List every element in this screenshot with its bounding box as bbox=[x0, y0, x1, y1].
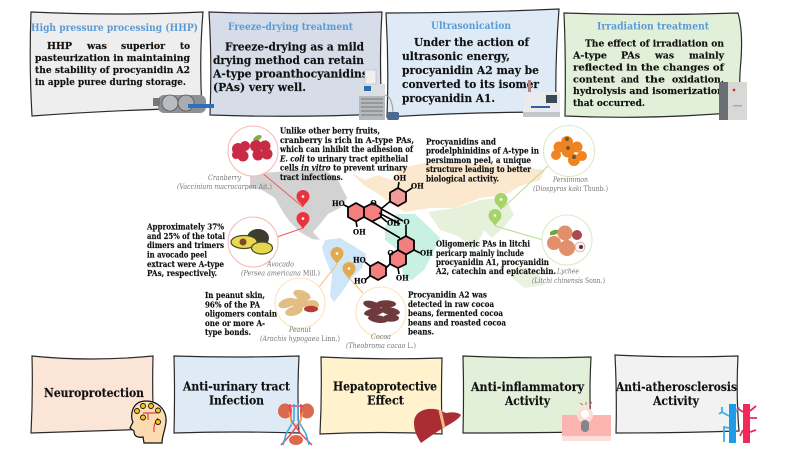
label: cranberry: (Vaccinium macrocarpon Ait.) bbox=[177, 183, 272, 191]
heading: anti-atherosclerosis bbox=[615, 380, 737, 408]
molecule: procyanidin A2: HO bbox=[354, 276, 367, 286]
text: litchi description bbox=[435, 239, 556, 276]
text: irradiation body: reflected in the changes of bbox=[573, 62, 725, 74]
food: lychee bbox=[542, 215, 592, 265]
heading: anti-inflammatory: Anti-inflammatory bbox=[470, 380, 585, 394]
text: HHP body: HHP bbox=[47, 41, 72, 52]
text: peanut description: one or more A- bbox=[205, 318, 265, 328]
heading: ultrasonication: Ultrasonication bbox=[431, 21, 512, 32]
label: cranberry: Cranberry bbox=[208, 174, 242, 182]
text: HHP body: to bbox=[180, 41, 191, 52]
panel: freeze-drying bbox=[209, 12, 382, 116]
panel: anti-inflammatory activity bbox=[463, 356, 591, 433]
label: persimmon: Persimmon bbox=[552, 176, 588, 184]
pin: lychee bbox=[488, 209, 502, 226]
heading: hepatoprotective: Hepatoprotective bbox=[333, 380, 437, 394]
icon: kidneys bbox=[278, 404, 314, 445]
text: litchi description: Oligomeric PAs in litchi bbox=[436, 239, 530, 249]
heading: anti-inflammatory bbox=[470, 380, 585, 408]
molecule: procyanidin A2: O bbox=[404, 218, 410, 226]
food: avocado bbox=[228, 217, 278, 267]
icon: liver bbox=[414, 409, 461, 443]
text: cranberry description: tract infections. bbox=[280, 172, 343, 182]
label: peanut bbox=[260, 326, 340, 343]
molecule: procyanidin A2: HO bbox=[332, 199, 345, 208]
text: irradiation body: A-type bbox=[572, 50, 607, 62]
text: irradiation body: oxidation, bbox=[672, 74, 724, 86]
label: lychee: (Litchi chinensis Sonn.) bbox=[532, 277, 605, 285]
pin: cocoa bbox=[342, 262, 356, 279]
label: cocoa: (Theobroma cacao L.) bbox=[346, 342, 416, 350]
label: lychee: Lychee bbox=[556, 268, 579, 276]
text: HHP body: the stability of procyanidin A2 bbox=[35, 65, 190, 76]
icon: irradiation cabinet bbox=[719, 82, 747, 120]
panel: high pressure processing bbox=[30, 12, 203, 116]
text: ultrasonication body: Under the action of bbox=[414, 35, 530, 49]
text: freeze-drying body: A-type proanthocyanidins bbox=[212, 66, 368, 80]
label: persimmon: (Diospyros kaki Thunb.) bbox=[533, 185, 608, 193]
text: cranberry description: E. coli to urinary tract epithelial bbox=[279, 153, 408, 163]
icon: blood vessels bbox=[719, 404, 757, 443]
label: peanut: (Arachis hypogaea Linn.) bbox=[260, 335, 340, 343]
text: irradiation body: content bbox=[573, 74, 616, 86]
label: cocoa: Cocoa bbox=[371, 333, 391, 341]
text: irradiation body: mainly bbox=[689, 50, 724, 62]
label: avocado bbox=[241, 261, 320, 278]
text: avocado description: in avocado peel bbox=[147, 250, 207, 260]
text: HHP body: was bbox=[86, 41, 107, 52]
label: persimmon bbox=[533, 176, 608, 193]
text: irradiation body: PAs bbox=[621, 50, 640, 62]
label: peanut: Peanut bbox=[288, 326, 311, 334]
text: litchi description: A2, catechin and epicatechin. bbox=[435, 266, 556, 276]
text: ultrasonication body: converted to its isomer bbox=[402, 77, 540, 91]
text: peanut description: oligomers contain bbox=[205, 308, 277, 318]
icon: HHP machine bbox=[153, 95, 214, 113]
text: persimmon description bbox=[426, 136, 539, 183]
text: cranberry description: cranberry is rich in A-type PAs, bbox=[280, 135, 414, 145]
panel: ultrasonication bbox=[386, 9, 559, 117]
heading: neuroprotection: Neuroprotection bbox=[44, 386, 144, 400]
heading: anti-inflammatory: Activity bbox=[504, 394, 551, 408]
heading: anti-urinary bbox=[182, 380, 290, 408]
panel: anti-urinary tract infection bbox=[174, 356, 299, 433]
molecule: procyanidin A2: OH bbox=[387, 218, 400, 228]
text: irradiation body: hydrolysis and isomerization bbox=[573, 86, 724, 97]
heading: anti-urinary: Infection bbox=[209, 394, 264, 408]
pin: persimmon bbox=[494, 193, 508, 210]
icon: brain head bbox=[130, 401, 166, 443]
text: cranberry description bbox=[279, 126, 414, 182]
text: persimmon description: structure leading to better bbox=[426, 164, 532, 174]
world map bbox=[250, 163, 545, 302]
panel: hepatoprotective effect bbox=[320, 357, 442, 434]
text: avocado description bbox=[146, 222, 225, 278]
text: HHP body: pasteurization in maintaining bbox=[35, 53, 190, 64]
text: irradiation body: that occurred. bbox=[573, 98, 645, 109]
text: avocado description: and 25% of the total bbox=[147, 231, 225, 241]
text: avocado description: extract were A-type bbox=[147, 259, 224, 269]
text: avocado description: PAs, respectively. bbox=[147, 268, 217, 278]
text: cocoa description bbox=[408, 290, 506, 337]
text: ultrasonication body: procyanidin A2 may be bbox=[402, 63, 539, 77]
text: cocoa description: Procyanidin A2 was bbox=[408, 290, 487, 300]
molecule: procyanidin A2: OH bbox=[394, 174, 407, 182]
icon: skin inflammation bbox=[562, 402, 611, 441]
text: irradiation body: The effect of irradiation on bbox=[585, 38, 724, 50]
text: persimmon description: prodelphinidins of A-type in bbox=[426, 146, 539, 156]
heading: hepatoprotective: Effect bbox=[367, 394, 404, 408]
label: cocoa bbox=[346, 333, 416, 350]
label: avocado: Avocado bbox=[266, 261, 294, 269]
label: lychee bbox=[532, 268, 605, 285]
label: cranberry bbox=[177, 174, 272, 191]
panel: anti-atherosclerosis activity bbox=[615, 355, 739, 433]
text: irradiation body bbox=[572, 38, 725, 109]
heading: anti-atherosclerosis: Anti-atherosclerosis bbox=[615, 380, 737, 394]
pin: avocado bbox=[296, 212, 310, 229]
text: avocado description: Approximately 37% bbox=[146, 222, 224, 232]
text: peanut description: In peanut skin, bbox=[205, 290, 265, 300]
label: avocado: (Persea americana Mill.) bbox=[241, 270, 320, 278]
food: cranberry bbox=[228, 126, 278, 176]
text: persimmon description: biological activity. bbox=[426, 173, 499, 183]
heading: irradiation: Irradiation treatment bbox=[597, 22, 709, 32]
text: avocado description: dimers and trimers bbox=[147, 240, 224, 250]
molecule: procyanidin A2: HO bbox=[353, 256, 366, 264]
pin: peanut bbox=[330, 247, 344, 264]
pin: cranberry bbox=[296, 190, 310, 207]
text: peanut description bbox=[205, 290, 277, 337]
panel: irradiation bbox=[564, 13, 742, 117]
text: cocoa description: beans. bbox=[408, 327, 434, 337]
panel: neuroprotection bbox=[31, 356, 154, 433]
text: irradiation body: the bbox=[645, 74, 665, 86]
text: irradiation body: was bbox=[654, 50, 674, 62]
molecule: procyanidin A2: OH bbox=[396, 274, 409, 282]
text: irradiation body: and bbox=[621, 74, 639, 86]
text: ultrasonication body bbox=[402, 35, 540, 105]
text: persimmon description: persimmon peel, a unique bbox=[426, 155, 531, 165]
text: HHP body: superior bbox=[121, 41, 166, 52]
heading: hepatoprotective bbox=[333, 380, 437, 408]
text: freeze-drying body: Freeze-drying as a mild bbox=[225, 40, 364, 54]
text: ultrasonication body: ultrasonic energy, bbox=[402, 49, 510, 63]
text: freeze-drying body bbox=[212, 40, 368, 94]
molecule: procyanidin A2: O bbox=[370, 198, 377, 208]
text: litchi description: pericarp mainly include bbox=[436, 248, 524, 258]
text: persimmon description: Procyanidins and bbox=[426, 136, 496, 146]
text: cranberry description: cells in vitro to prevent urinary bbox=[280, 163, 407, 173]
heading: anti-urinary: Anti-urinary tract bbox=[182, 380, 290, 394]
text: litchi description: procyanidin A1, procyanidin bbox=[436, 257, 549, 267]
text: cocoa description: beans, fermented cocoa bbox=[408, 308, 503, 318]
heading: HHP: High pressure processing (HHP) bbox=[31, 23, 198, 34]
text: cranberry description: Unlike other berry fruits, bbox=[280, 126, 380, 136]
heading: freeze-drying: Freeze-drying treatment bbox=[228, 22, 353, 33]
text: HHP body bbox=[35, 41, 191, 88]
heading: anti-atherosclerosis: Activity bbox=[652, 394, 700, 408]
molecule: procyanidin A2: O bbox=[388, 248, 394, 258]
molecule: procyanidin A2: OH bbox=[353, 228, 366, 236]
text: cranberry description: which can inhibit the adhesion of bbox=[279, 144, 413, 154]
molecule: procyanidin A2: OH bbox=[420, 248, 433, 258]
text: peanut description: type bonds. bbox=[205, 327, 251, 337]
food: persimmon bbox=[544, 126, 594, 176]
text: ultrasonication body: procyanidin A1. bbox=[402, 91, 495, 105]
text: freeze-drying body: drying method can retain bbox=[213, 53, 365, 67]
molecule: procyanidin A2: OH bbox=[411, 182, 424, 190]
icon: ultrasonic device bbox=[523, 80, 560, 117]
text: peanut description: 96% of the PA bbox=[205, 299, 261, 309]
icon: freeze dryer bbox=[359, 70, 399, 120]
text: cocoa description: detected in raw cocoa bbox=[408, 299, 494, 309]
text: HHP body: in apple puree during storage. bbox=[35, 77, 186, 88]
connector lines bbox=[261, 166, 548, 293]
text: cocoa description: beans and roasted cocoa bbox=[408, 318, 506, 328]
food: cocoa bbox=[356, 287, 406, 337]
molecule: procyanidin A2 bbox=[332, 174, 433, 286]
food: peanut bbox=[275, 278, 325, 328]
text: freeze-drying body: (PAs) very well. bbox=[213, 80, 306, 94]
